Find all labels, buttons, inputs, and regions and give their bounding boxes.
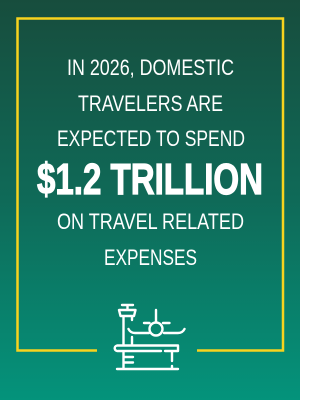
headline text: EXPECTED TO SPEND [57,126,245,151]
closing text: EXPENSES [104,245,197,270]
headline text: TRAVELERS ARE [78,91,223,116]
icon: airport tower, plane and terminal [115,305,184,369]
icon: control tower [119,305,136,345]
headline text: IN 2026, DOMESTIC [67,55,234,80]
yellow frame [18,18,283,350]
icon: terminal building [115,346,178,369]
icon: plane [128,310,184,333]
headline text [57,55,245,151]
closing text: ON TRAVEL RELATED [57,209,244,234]
closing text [57,209,244,270]
